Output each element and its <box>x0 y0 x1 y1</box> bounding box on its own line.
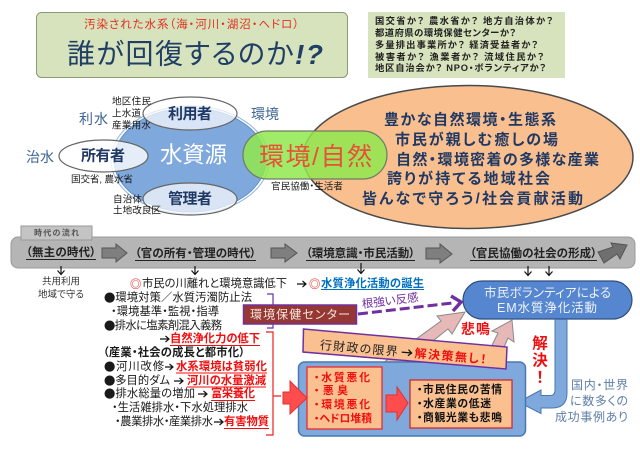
stakeholder captions: 土地改良区 <box>113 204 161 216</box>
birth of water purification activity: 水質浄化活動の誕生 <box>321 276 424 290</box>
text block: citizen awareness: ◎ <box>130 276 141 292</box>
success cases note: に数多くの <box>570 393 628 408</box>
panel: complaints list <box>410 380 512 428</box>
text block: industrial growth: ●多目的ダム <box>104 373 170 389</box>
side labels: water roles: 環境 <box>251 106 279 122</box>
panel: who question list: 多量排出事業所か？ 経済受益者か？ <box>375 39 538 50</box>
environment nature label: 環境/自然 <box>259 143 372 171</box>
early era note <box>38 276 84 300</box>
text block: industrial growth: ・農業排水・産業排水 <box>115 414 213 428</box>
water resource blob <box>111 106 269 214</box>
text block: citizen awareness: 市民の川離れと環境意識低下 <box>142 276 287 290</box>
banner: fiscal limits <box>303 329 507 369</box>
panel: EM volunteer activity: 市民ボランティアによる <box>484 286 611 300</box>
subtitle: 汚染された水系（海・河川・湖沼・ヘドロ） <box>84 17 299 31</box>
pink arrow from complaints <box>474 320 514 384</box>
early era note: 地域で守る <box>38 288 84 300</box>
era: government: （官の所有・管理の時代） <box>135 246 256 260</box>
pollution items: ・環境悪化 <box>314 398 370 411</box>
pollution items <box>314 370 372 425</box>
success cases note: 成功事例あり <box>555 410 628 424</box>
text block: industrial growth: 有害物質 <box>224 414 269 428</box>
solution label <box>532 334 548 386</box>
side labels: water roles <box>26 106 279 165</box>
solution arrow <box>518 320 567 414</box>
era: partnership: （官民協働の社会の形成） <box>470 246 597 260</box>
panel: who question list: 都道府県の環境保健センターか？ <box>375 27 516 38</box>
banner text: 解決策無し！ <box>414 345 487 367</box>
complaints items: ・市民住民の苦情 <box>417 382 502 396</box>
oval: managers: 管理者 <box>168 190 212 208</box>
panel: who question list: 被害者か？ 漁業者か？ 流域住民か？ <box>375 51 544 62</box>
stakeholder captions: 国交省, 農水省 <box>71 174 133 186</box>
gray arrow 4 <box>598 243 627 263</box>
timeline tab <box>21 226 92 240</box>
text block: citizen awareness: ◎ <box>309 276 320 292</box>
vision statements: 自然・環境密着の多様な産業 <box>396 150 599 168</box>
red arrow between lists <box>386 387 408 420</box>
text block: industrial growth: 富栄養化 <box>211 386 256 400</box>
era: environmental awareness: （環境意識・市民活動） <box>306 246 415 260</box>
success cases note <box>555 378 628 424</box>
text block: industrial growth: （産業・社会の成長と都市化） <box>103 345 245 359</box>
stakeholder captions <box>71 96 343 216</box>
text block: environmental measures <box>104 290 260 346</box>
panel: pollution list <box>307 367 382 429</box>
panel: who question list <box>368 12 565 78</box>
text block: citizen awareness <box>130 276 424 292</box>
stakeholder captions: 官民協働・生活者 <box>271 180 343 192</box>
panel: problems <box>298 362 526 436</box>
text block: industrial growth: 河川の水量激減 <box>187 373 267 387</box>
stakeholder captions: 地区住民 <box>112 96 151 108</box>
vision statements: 市民が親しむ癒しの場 <box>395 130 558 148</box>
era: no owner: （無主の時代） <box>26 245 96 259</box>
side labels: water roles: 治水 <box>26 149 54 165</box>
vision statements: 皆んなで守ろう/社会貢献活動 <box>362 190 583 208</box>
banner text: 行財政の限界 <box>319 337 398 359</box>
early era note: 共用利用 <box>42 276 80 288</box>
red bracket <box>266 332 281 435</box>
outcry label: 悲鳴 <box>461 321 490 337</box>
pink arrow to volunteers <box>376 312 465 378</box>
text block: environmental measures: 自然浄化力の低下 <box>170 331 260 345</box>
orange ellipse: vision <box>303 86 633 228</box>
text block: industrial growth: ●河川改修 <box>104 359 165 375</box>
banner text <box>319 337 487 367</box>
complaints items: ・商観光業も悲鳴 <box>417 410 502 424</box>
antipathy label: 根強い反感 <box>361 290 420 311</box>
pollution items: ・悪臭 <box>314 383 348 397</box>
vision statements <box>362 110 599 208</box>
vision statements: 誇りが持てる地域社会 <box>387 170 550 188</box>
solution label: ！ <box>536 370 544 386</box>
oval: owners: 所有者 <box>81 148 125 164</box>
side labels: water roles: 利水 <box>79 111 108 127</box>
center: environmental health center <box>244 305 356 324</box>
gray arrow 1 <box>102 244 127 262</box>
down arrows from eras <box>58 263 552 276</box>
oval: users: 利用者 <box>168 106 212 122</box>
center: environmental health center: 環境保健センター <box>250 308 350 322</box>
text block: industrial growth <box>103 345 269 428</box>
timeline tab label: 時代の流れ <box>34 228 79 238</box>
vision statements: 豊かな自然環境・生態系 <box>384 110 556 128</box>
oval: owners <box>59 140 148 172</box>
text block: industrial growth: 水系環境は貧弱化 <box>176 359 268 373</box>
complaints items <box>417 382 502 424</box>
text block: environmental measures: ●排水に塩素剤混入義務 <box>104 318 222 334</box>
pollution items: ・ヘドロ堆積 <box>314 411 372 425</box>
success cases note: 国内・世界 <box>571 378 628 392</box>
text block: environmental measures: ●環境対策／水質汚濁防止法 <box>104 290 252 306</box>
stakeholder captions: 上水道 <box>112 108 141 120</box>
solution label: 解 <box>532 334 548 352</box>
environment nature pill <box>243 131 387 179</box>
water resource label: 水資源 <box>160 142 227 168</box>
panel: EM volunteer activity <box>463 281 632 319</box>
panel: who question list: 地区自治会か？ NPO・ボランティアか？ <box>375 62 546 73</box>
gray arrow 3 <box>426 244 452 263</box>
oval: managers <box>143 183 237 215</box>
solution label: 決 <box>532 352 548 370</box>
text block: industrial growth: ・生活雑排水・下水処理排水 <box>112 400 248 414</box>
oval: users <box>143 97 237 130</box>
text block: industrial growth: ●排水総量の増加 <box>104 386 195 402</box>
pollution items: ・水質悪化 <box>314 370 370 384</box>
text block: environmental measures: ・環境基準・監視・指導 <box>111 304 219 318</box>
stakeholder captions: 産業用水 <box>112 120 151 132</box>
panel: EM volunteer activity: EM水質浄化活動 <box>497 300 597 315</box>
dashed arrow: strong antipathy <box>358 290 461 314</box>
complaints items: ・水産業の低迷 <box>417 396 491 410</box>
red arrow into problems <box>283 381 307 414</box>
stakeholder captions: 自治体 <box>113 194 142 206</box>
title panel <box>36 12 348 78</box>
purple bracket <box>267 294 273 328</box>
gray arrow 2 <box>271 244 297 262</box>
timeline bar <box>11 226 635 268</box>
panel: who question list: 国交省か？ 農水省か？ 地方自治体か？ <box>375 15 553 26</box>
main title: 誰が回復するのか!? <box>67 38 323 70</box>
